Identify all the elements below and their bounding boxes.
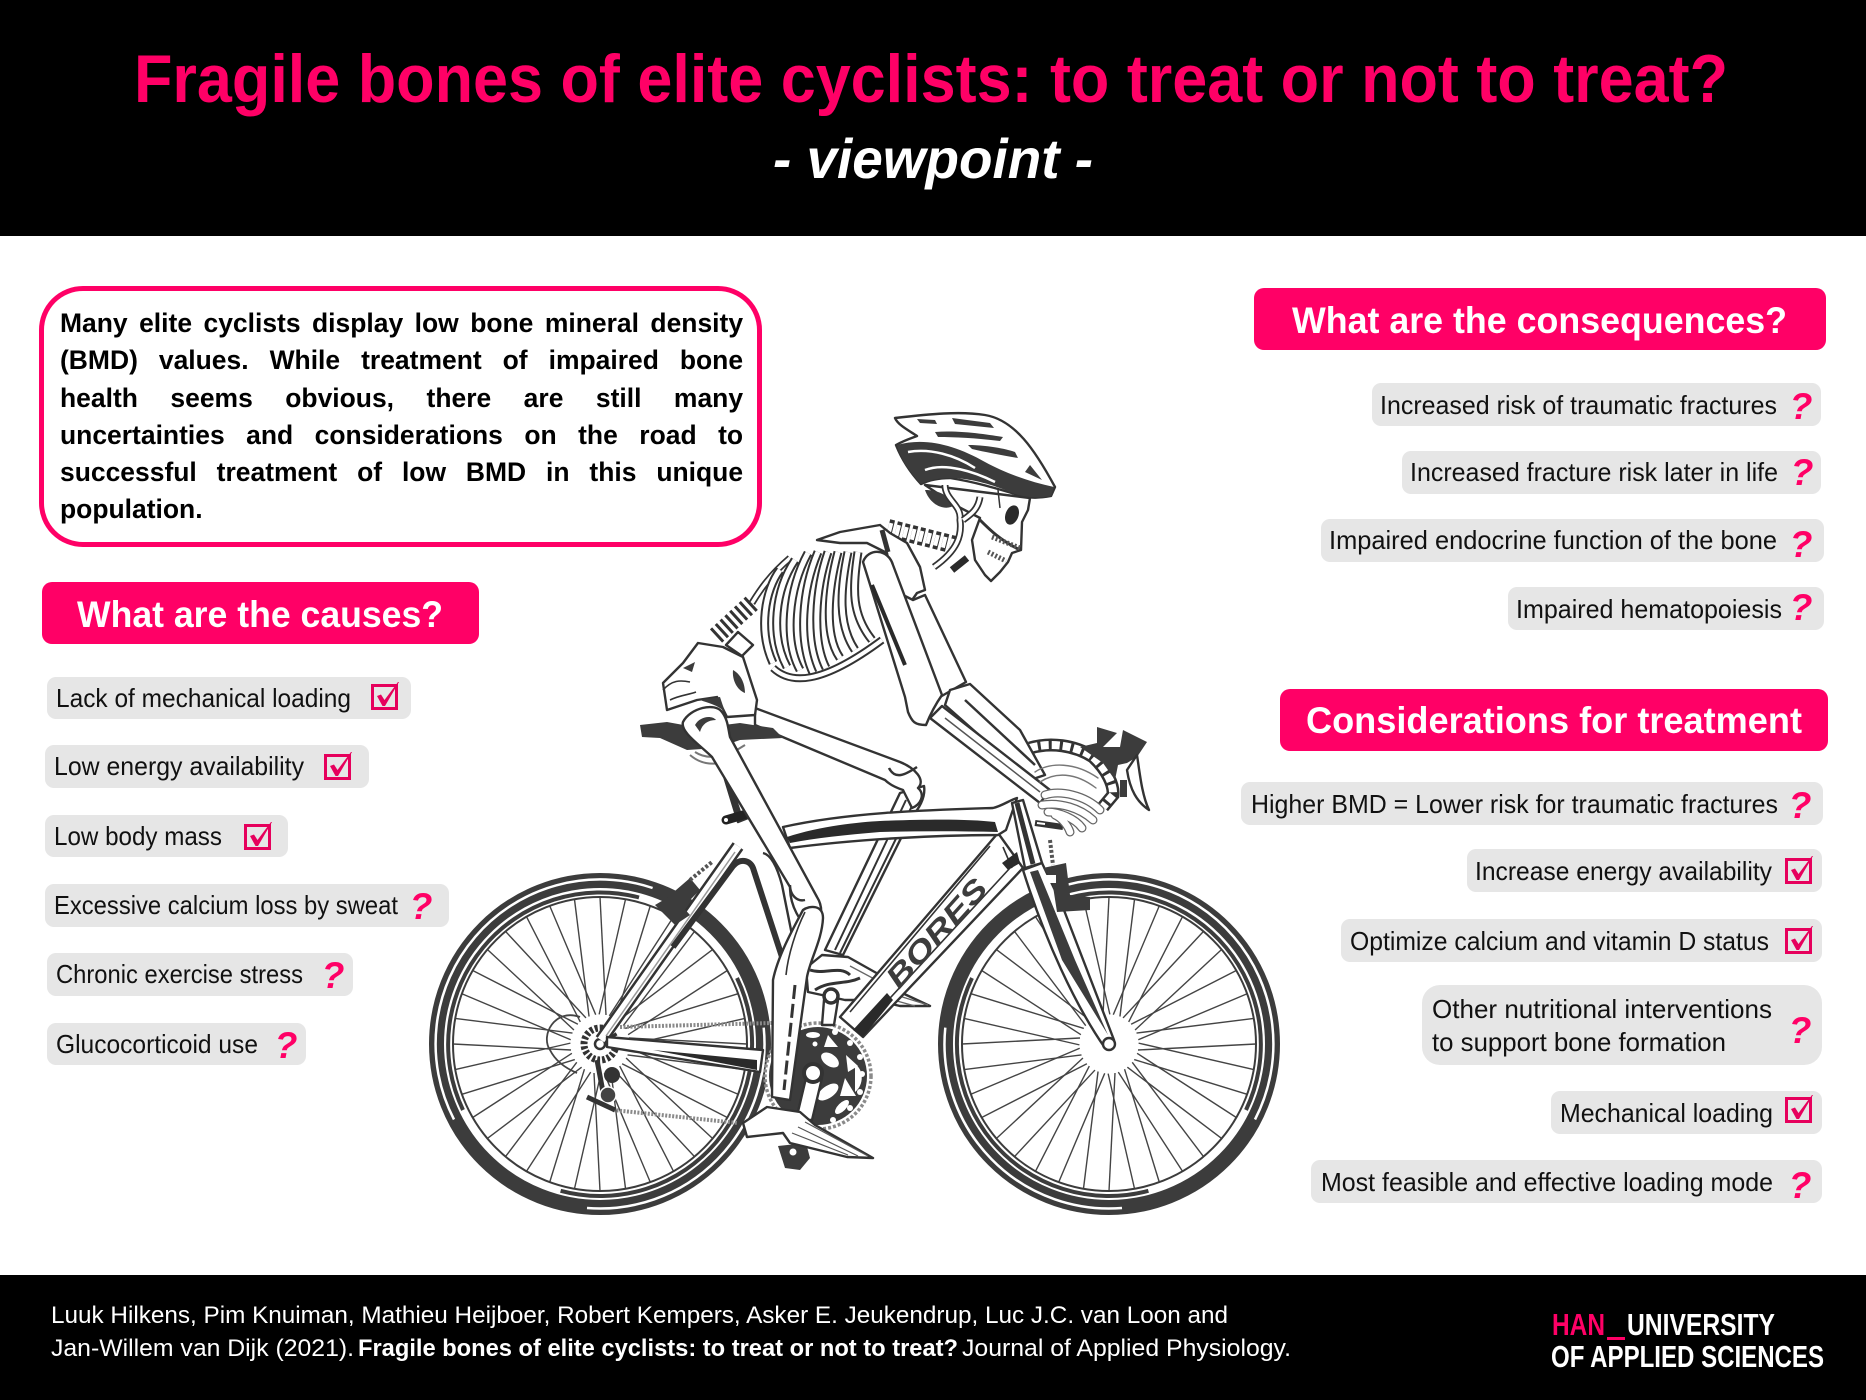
pelvis — [663, 643, 757, 717]
saddle — [640, 722, 783, 764]
cause: lack of mechanical loading — [47, 677, 411, 719]
near foot — [743, 1107, 873, 1158]
consequence: fracture risk later in life: ? — [1791, 452, 1813, 493]
cause: excessive calcium loss by sweat: ? — [410, 886, 432, 927]
intro paragraph: health seems obvious, there are still many — [60, 383, 743, 413]
university logo: HAN — [1552, 1307, 1605, 1342]
consideration: calcium and vitamin D — [1341, 919, 1822, 962]
citation: Fragile bones of elite cyclists: to treat or not to treat? — [358, 1335, 958, 1362]
consequences heading: What are the consequences? — [1292, 300, 1787, 341]
consequence: traumatic fractures: Increased risk of traumatic fractures — [1380, 390, 1777, 420]
citation: Luuk Hilkens, Pim Knuiman, Mathieu Heijboer, Robert Kempers, Asker E. Jeukendrup, Luc J.C. van Loon and — [51, 1302, 1228, 1329]
cause: glucocorticoid use: Glucocorticoid use — [56, 1029, 258, 1059]
panel: introduction text box — [39, 286, 762, 547]
near tibia — [772, 907, 823, 1100]
consideration: increase energy availability: Increase energy availability — [1475, 856, 1772, 886]
university logo: UNIVERSITY — [1627, 1307, 1775, 1342]
frame: seat stays and chain stay — [601, 846, 783, 1072]
intro paragraph: uncertainties and considerations on the road to — [60, 420, 743, 450]
consequence: endocrine function: Impaired endocrine function of the bone — [1329, 525, 1777, 555]
footer band — [0, 1275, 1866, 1400]
consequences heading — [1254, 288, 1826, 350]
cycling helmet — [895, 413, 1055, 498]
chain — [613, 1023, 772, 1123]
consideration: increase energy availability — [1467, 849, 1822, 892]
consequence: hematopoiesis — [1508, 587, 1824, 630]
intro paragraph: Many elite cyclists display low bone mineral density — [60, 308, 743, 338]
treatment heading: Considerations for treatment — [1306, 700, 1802, 741]
causes heading: What are the causes? — [77, 594, 443, 635]
consequence: traumatic fractures: ? — [1790, 386, 1812, 427]
cause: excessive calcium loss by sweat — [45, 884, 449, 927]
cause: low energy availability: Low energy availability — [54, 751, 304, 781]
handlebar stem and drop bar — [993, 740, 1113, 827]
rear cassette and derailleur — [547, 1015, 620, 1110]
consideration: other nutritional interventions: Other nutritional interventions — [1432, 994, 1772, 1024]
consequence: fracture risk later in life — [1402, 451, 1821, 494]
hand — [1035, 765, 1100, 832]
brakes — [655, 840, 1090, 925]
far femur and knee — [755, 708, 922, 808]
consequence: hematopoiesis: Impaired hematopoiesis — [1516, 594, 1782, 624]
university logo — [1551, 1307, 1824, 1374]
cause: low body mass: Low body mass — [54, 821, 222, 851]
scapula and clavicle — [817, 525, 925, 613]
treatment heading — [1280, 689, 1828, 751]
consequences list — [1321, 383, 1824, 630]
brake hood and lever — [1080, 727, 1149, 810]
brand lettering on down tube: BORES — [880, 872, 995, 995]
frame: head tube — [1012, 800, 1042, 868]
consideration: loading mode — [1311, 1160, 1822, 1206]
treatment list — [1241, 782, 1823, 1206]
cause: low energy availability — [45, 745, 369, 788]
consideration: higher BMD — [1241, 782, 1823, 826]
forearm bones — [930, 684, 1050, 803]
consideration: other nutritional interventions — [1422, 985, 1822, 1065]
far upper arm — [893, 590, 966, 697]
cause: lack of mechanical loading: Lack of mechanical loading — [56, 683, 351, 713]
far tibia — [825, 786, 924, 955]
intro paragraph: successful treatment of low BMD in this unique — [60, 457, 743, 487]
cause: glucocorticoid use — [47, 1023, 306, 1066]
skull — [925, 485, 1030, 581]
header band — [0, 0, 1866, 236]
lumbar spine — [716, 558, 790, 656]
crank arm and pedal — [778, 1064, 822, 1170]
frame: down tube with brand — [840, 833, 1023, 1037]
cause: chronic exercise stress: ? — [322, 955, 344, 996]
frame: top tube — [783, 798, 1017, 848]
cause: glucocorticoid use: ? — [275, 1025, 297, 1066]
cause: low body mass — [45, 815, 288, 857]
intro paragraph: (BMD) values. While treatment of impaired bone — [60, 345, 743, 375]
ribcage — [765, 552, 882, 678]
consideration: mechanical loading — [1551, 1091, 1822, 1134]
frame: seat post and clamp — [720, 760, 750, 822]
consideration: calcium and vitamin D: Optimize calcium and vitamin D status — [1350, 926, 1769, 956]
consequence: hematopoiesis: ? — [1790, 587, 1812, 628]
intro paragraph: population. — [60, 494, 203, 524]
consideration: loading mode: Most feasible and effective loading mode — [1321, 1167, 1773, 1197]
near femur — [683, 707, 821, 928]
helmet straps — [934, 485, 980, 570]
cause: chronic exercise stress: Chronic exercise stress — [56, 959, 303, 989]
rear wheel — [416, 873, 784, 1215]
consequence: traumatic fractures — [1372, 383, 1821, 427]
consequence: fracture risk later in life: Increased fracture risk later in life — [1410, 457, 1778, 487]
near upper arm — [863, 552, 942, 725]
citation: Jan-Willem van Dijk (2021). — [51, 1335, 354, 1362]
frame: fork — [1023, 863, 1115, 1050]
causes list — [45, 677, 449, 1066]
consideration: other nutritional interventions: ? — [1789, 1010, 1811, 1051]
subtitle: - viewpoint - — [773, 127, 1093, 190]
consequence: endocrine function: ? — [1790, 524, 1812, 565]
consideration: higher BMD: ? — [1789, 785, 1811, 826]
illustration: skeleton cyclist on a road bike — [416, 413, 1293, 1215]
citation — [51, 1302, 1291, 1362]
consideration: loading mode: ? — [1789, 1165, 1811, 1206]
front wheel — [925, 873, 1293, 1215]
neck vertebrae — [888, 528, 955, 545]
citation: Journal of Applied Physiology. — [962, 1335, 1291, 1362]
consideration: other nutritional interventions: to support bone formation — [1432, 1027, 1726, 1057]
far crank arm — [822, 989, 838, 1025]
cause: excessive calcium loss by sweat: Excessive calcium loss by sweat — [54, 890, 399, 920]
consequence: endocrine function — [1321, 519, 1824, 565]
far foot — [806, 955, 930, 1006]
title: Fragile bones of elite cyclists: to treat or not to treat? — [134, 41, 1728, 117]
consideration: higher BMD: Higher BMD = Lower risk for traumatic fractures — [1251, 789, 1778, 819]
cause: chronic exercise stress — [47, 953, 353, 996]
consideration: mechanical loading: Mechanical loading — [1560, 1098, 1773, 1128]
causes heading — [42, 582, 479, 644]
intro paragraph — [60, 308, 743, 524]
frame: second tube behind the leg — [763, 853, 792, 935]
chainring — [765, 1023, 871, 1129]
